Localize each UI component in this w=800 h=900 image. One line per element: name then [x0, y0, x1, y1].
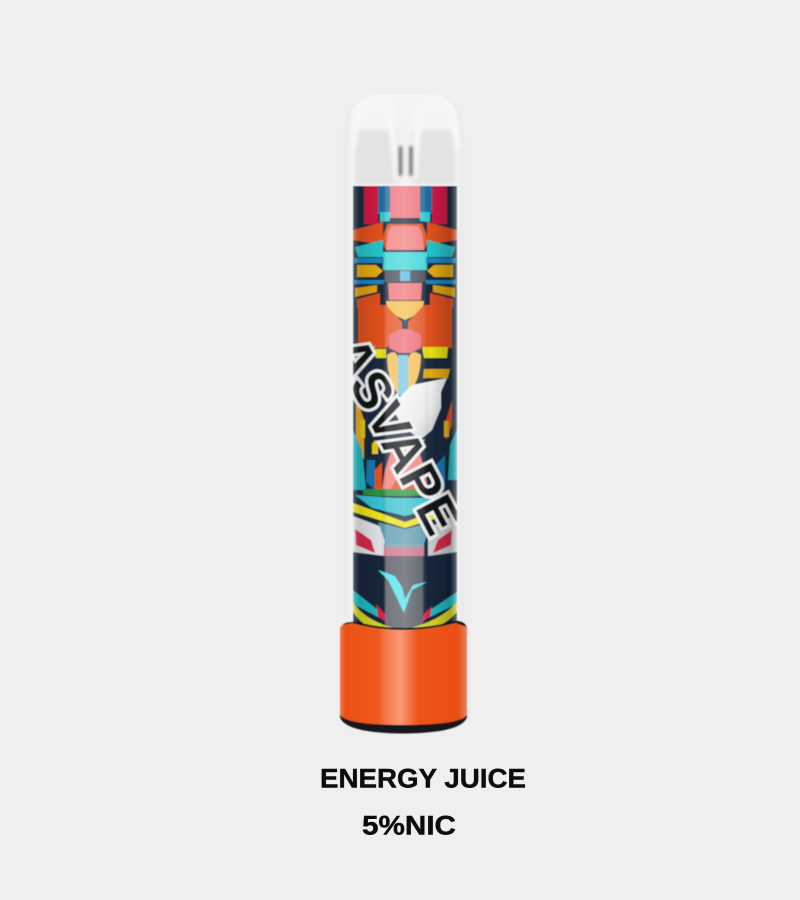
lower silver and teal panel: [353, 514, 457, 559]
icon: V logo: [378, 570, 427, 613]
totem lower body: [353, 395, 457, 496]
totem upper body: [353, 222, 457, 320]
product name: ENERGY JUICE: [320, 764, 526, 794]
product: disposable vape device: [339, 132, 468, 734]
totem mid body: [358, 305, 452, 395]
clear outer tube: [345, 93, 463, 622]
infographic: product card: [322, 132, 526, 835]
orange base: [340, 621, 467, 734]
chevron bands: [352, 494, 435, 529]
nicotine strength: 5%NIC: [362, 810, 456, 840]
top stripes: [364, 186, 447, 224]
mouthpiece: [350, 94, 460, 184]
logo artwork: white shard: [395, 377, 448, 439]
artwork wrap: [352, 185, 458, 628]
logo wordmark: ASVAPE: [320, 327, 472, 544]
tube reflection: [353, 186, 457, 636]
lower navy panel: [353, 556, 457, 636]
